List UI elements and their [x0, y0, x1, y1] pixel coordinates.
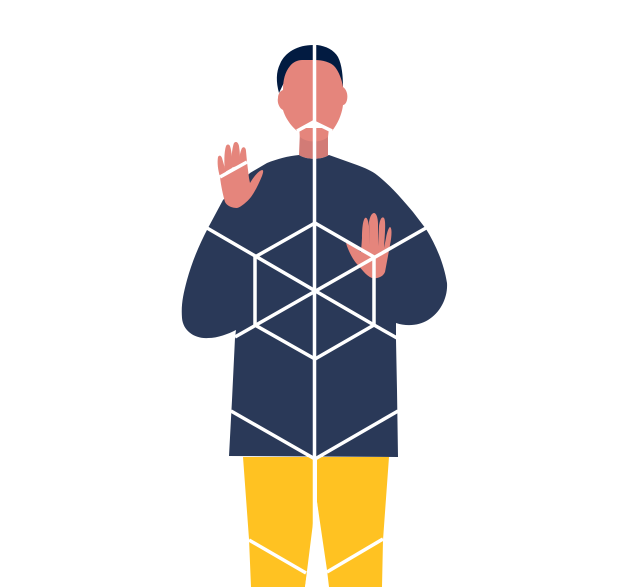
hair [277, 45, 343, 93]
neck [299, 128, 329, 159]
face [278, 60, 347, 131]
trousers [243, 457, 389, 587]
right hand on chest [346, 213, 392, 278]
sweater [182, 155, 447, 457]
left raised hand [218, 142, 263, 208]
leg gap [305, 502, 327, 587]
hexagon line network [207, 45, 426, 587]
